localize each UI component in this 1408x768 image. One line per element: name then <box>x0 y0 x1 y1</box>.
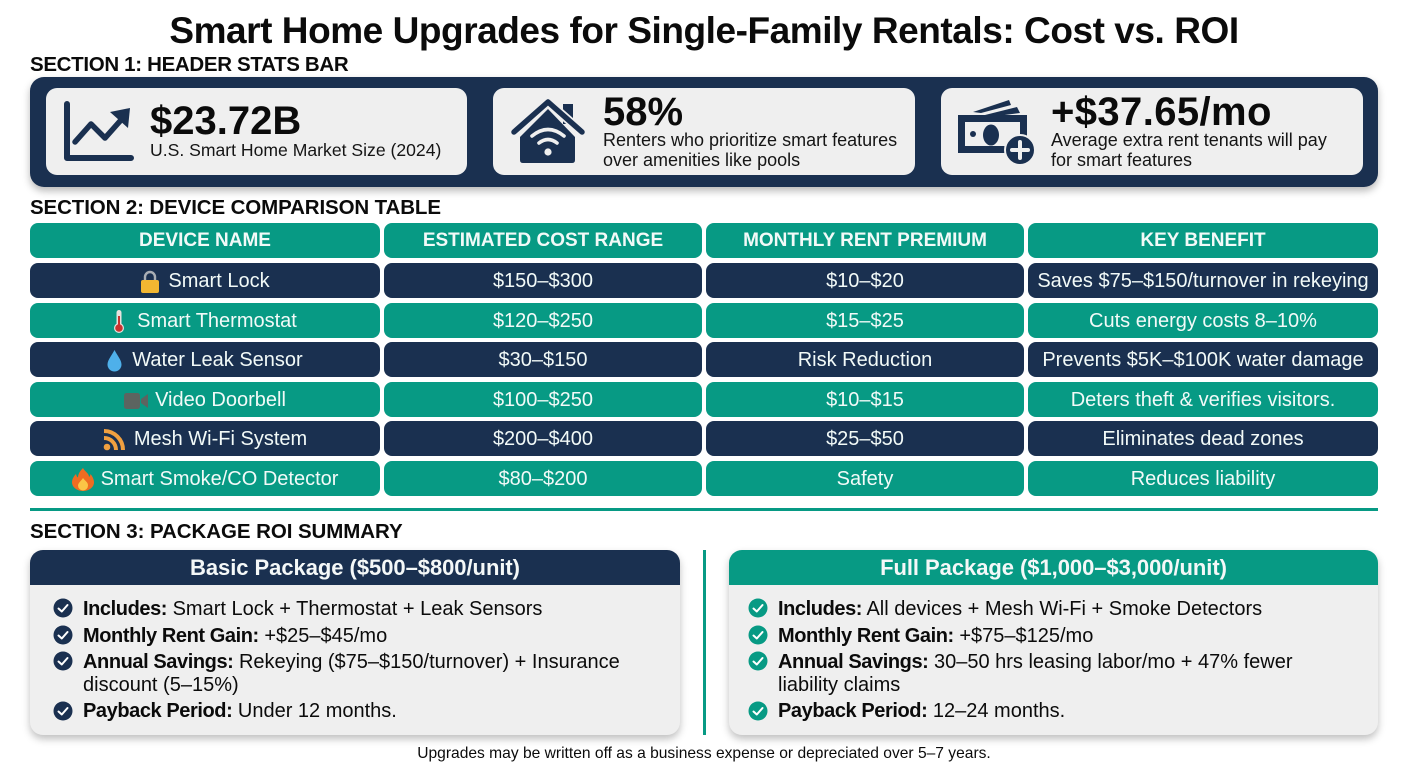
row: video doorbell: $100–$250 <box>493 389 593 411</box>
list item: annual savings <box>748 651 1292 696</box>
row: mesh wi-fi system: Mesh Wi-Fi System <box>134 428 307 450</box>
icon: cash with plus <box>958 100 1034 164</box>
row: video doorbell: $10–$15 <box>826 389 904 411</box>
row: water leak sensor: Risk Reduction <box>798 349 932 371</box>
row: smart thermostat <box>30 303 1378 338</box>
heading: section 2: SECTION 2: DEVICE COMPARISON TABLE <box>30 196 441 219</box>
list item: payback period: Payback Period: Under 12 months. <box>83 700 397 722</box>
row: video doorbell: Deters theft & verifies visitors. <box>1071 389 1335 411</box>
row: smart lock <box>30 263 1378 298</box>
stat label: Average extra rent tenants will pay <box>1051 130 1327 150</box>
title: Smart Home Upgrades for Single-Family Rentals: Cost vs. ROI <box>169 10 1239 51</box>
list item: annual savings: Annual Savings: Rekeying ($75–$150/turnover) + Insurance <box>83 651 620 673</box>
table header row: ESTIMATED COST RANGE <box>423 230 663 250</box>
row: smart lock: $10–$20 <box>826 270 904 292</box>
stat label <box>603 130 897 170</box>
icon: growth chart <box>64 101 134 161</box>
list item: payback period: Payback Period: 12–24 months. <box>778 700 1065 722</box>
heading: section 1: SECTION 1: HEADER STATS BAR <box>30 53 348 76</box>
row: water leak sensor <box>30 342 1378 377</box>
full package header: Full Package ($1,000–$3,000/unit) <box>880 555 1227 580</box>
list item: monthly rent gain: Monthly Rent Gain: +$75–$125/mo <box>778 625 1093 647</box>
panel: header stats bar <box>30 77 1378 187</box>
list item: monthly rent gain: Monthly Rent Gain: +$25–$45/mo <box>83 625 387 647</box>
stat value: $23.72B <box>150 99 301 143</box>
row: smart thermostat: $120–$250 <box>493 310 593 332</box>
list item: annual savings: Annual Savings: 30–50 hrs leasing labor/mo + 47% fewer <box>778 651 1292 673</box>
row: mesh wi-fi system: $25–$50 <box>826 428 904 450</box>
row: smart smoke/co detector: Reduces liability <box>1131 468 1275 490</box>
stat label: U.S. Smart Home Market Size (2024) <box>150 140 441 160</box>
row: smart smoke/co detector: Safety <box>837 468 893 490</box>
list item: includes: Includes: All devices + Mesh Wi-Fi + Smoke Detectors <box>778 598 1262 620</box>
row: water leak sensor: Water Leak Sensor <box>132 349 303 371</box>
panel: basic package <box>30 550 680 735</box>
row: mesh wi-fi system <box>30 421 1378 456</box>
row: video doorbell: Video Doorbell <box>155 389 286 411</box>
list item: includes: Includes: Smart Lock + Thermostat + Leak Sensors <box>83 598 542 620</box>
stat label: over amenities like pools <box>603 150 800 170</box>
full package header <box>729 550 1378 585</box>
stat label <box>1051 130 1327 170</box>
row: smart smoke/co detector: $80–$200 <box>498 468 587 490</box>
row: smart lock: $150–$300 <box>493 270 593 292</box>
table header row: KEY BENEFIT <box>1140 230 1266 250</box>
row: water leak sensor: $30–$150 <box>498 349 587 371</box>
table header row: DEVICE NAME <box>139 230 271 250</box>
row: smart lock: Saves $75–$150/turnover in rekeying <box>1037 270 1369 292</box>
basic package header <box>30 550 680 585</box>
list item: annual savings: liability claims <box>778 674 900 696</box>
stat value: 58% <box>603 90 683 134</box>
row: smart thermostat: $15–$25 <box>826 310 904 332</box>
row: mesh wi-fi system: $200–$400 <box>493 428 593 450</box>
stat card: market size <box>46 88 467 175</box>
table: device comparison <box>30 223 1378 496</box>
stat label: Renters who prioritize smart features <box>603 130 897 150</box>
row: smart smoke/co detector: Smart Smoke/CO Detector <box>101 468 338 490</box>
row: water leak sensor: Prevents $5K–$100K water damage <box>1042 349 1364 371</box>
icon: house with wifi <box>511 99 585 163</box>
heading: section 3: SECTION 3: PACKAGE ROI SUMMARY <box>30 520 403 543</box>
list item: annual savings: discount (5–15%) <box>83 674 239 696</box>
basic package header: Basic Package ($500–$800/unit) <box>190 555 520 580</box>
footnote: Upgrades may be written off as a business expense or depreciated over 5–7 years. <box>417 745 991 762</box>
row: mesh wi-fi system: Eliminates dead zones <box>1102 428 1304 450</box>
row: video doorbell <box>30 382 1378 417</box>
basic package list <box>54 598 620 722</box>
row: smart lock: Smart Lock <box>168 270 270 292</box>
panel: full package <box>729 550 1378 735</box>
row: smart thermostat: Smart Thermostat <box>137 310 297 332</box>
stat card: rent premium <box>941 88 1363 175</box>
stat card: renters <box>493 88 915 175</box>
table header row <box>30 223 1378 258</box>
list item: annual savings <box>54 651 620 696</box>
row: smart smoke/co detector <box>30 461 1378 496</box>
row: smart thermostat: Cuts energy costs 8–10% <box>1089 310 1317 332</box>
table header row: MONTHLY RENT PREMIUM <box>743 230 987 250</box>
stat label: for smart features <box>1051 150 1192 170</box>
full package list <box>748 598 1292 722</box>
stat value: +$37.65/mo <box>1051 90 1272 134</box>
